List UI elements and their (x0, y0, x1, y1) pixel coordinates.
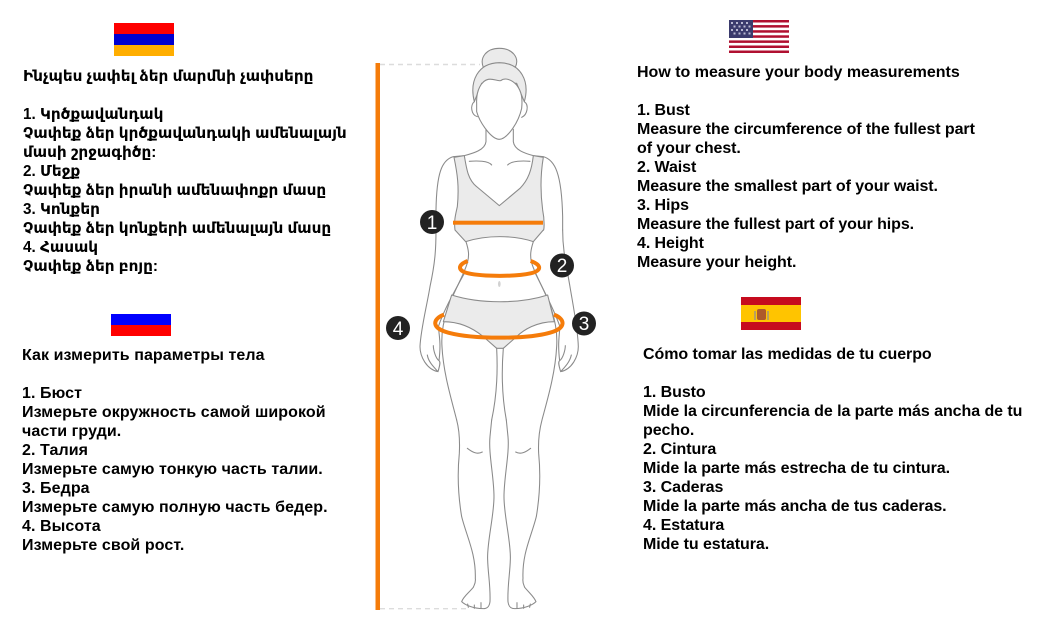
flag: USA (729, 20, 789, 53)
number badge 4: 4 (393, 319, 404, 340)
text block: Spanish instructions: Cómo tomar las medidas de tu cuerpo 1. Busto Mide la circunferencia de la parte más ancha de tu pecho. 2. Cintura Mide la parte más estrecha de tu cintura. 3. Caderas Mide la parte más ancha de tus caderas. 4. Estatura Mide tu estatura. (643, 346, 1022, 553)
flag: Russia (111, 303, 171, 336)
number badge 1: 1 (427, 213, 437, 234)
woman outline (420, 48, 578, 609)
text block: English instructions: How to measure your body measurements 1. Bust Measure the circumference of the fullest part of your chest. 2. Waist Measure the smallest part of your waist. 3. Hips Measure the fullest part of your hips. 4. Height Measure your height. (637, 64, 975, 271)
number badge 3 (572, 312, 596, 336)
number badge 3: 3 (579, 314, 589, 335)
text block: Russian instructions: Как измерить параметры тела 1. Бюст Измерьте окружность самой широкой части груди. 2. Талия Измерьте самую тонкую часть талии. 3. Бедра Измерьте самую полную часть бедер. 4. Высота Измерьте свой рост. (22, 347, 328, 554)
number badge 4 (386, 316, 410, 340)
measuring bands (435, 221, 563, 338)
number badge 2 (550, 254, 574, 278)
number badge 2: 2 (557, 256, 567, 277)
height measuring line (376, 63, 480, 610)
flag: Armenia (114, 23, 174, 56)
text block: Armenian instructions: Ինչպես չափել ձեր մարմնի չափսերը 1. Կրծքավանդակ Չափեք ձեր կրծքավանդակի ամենալայն մասի շրջագիծը: 2. Մեջք Չափեք ձեր իրանի ամենափոքր մասը 3. Կոնքեր Չափեք ձեր կոնքերի ամենալայն մասը 4. Հասակ Չափեք ձեր բոյը: (23, 68, 347, 275)
number badge 1 (420, 210, 444, 234)
flag: Spain (741, 297, 801, 330)
